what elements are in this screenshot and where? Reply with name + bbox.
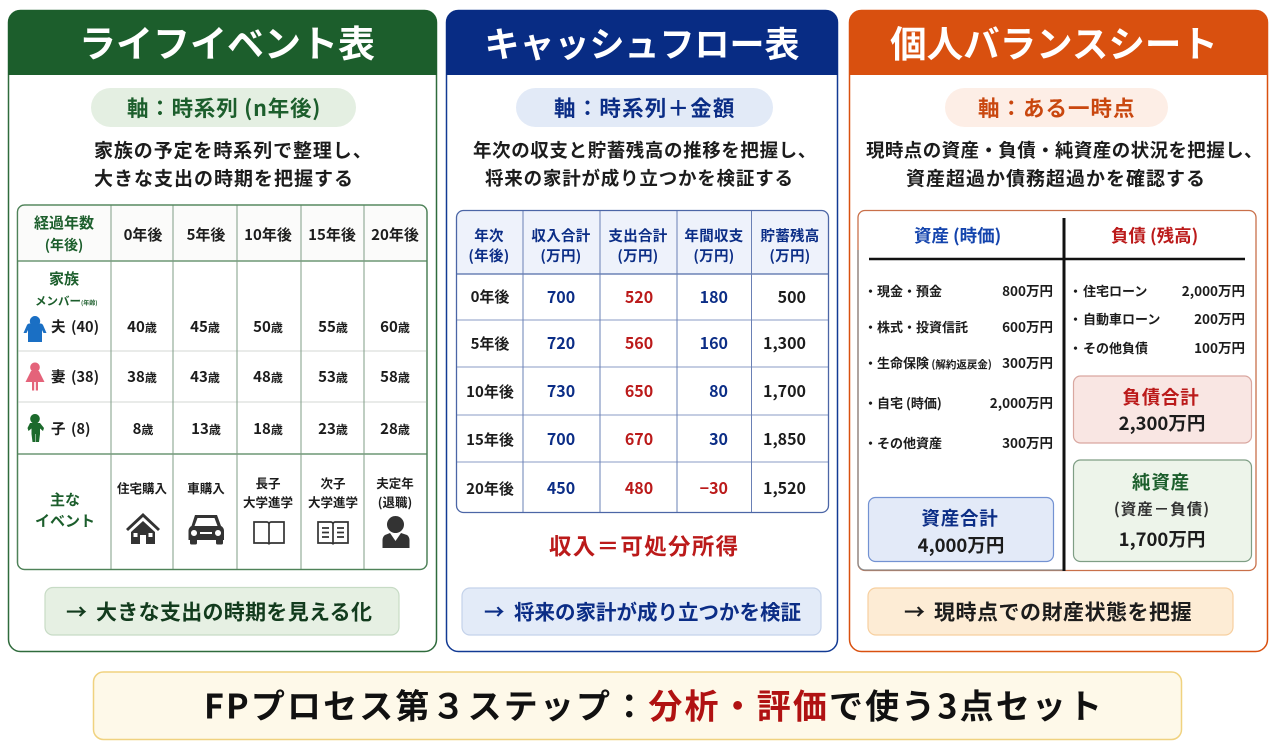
ages: husband row: 40歳 bbox=[127, 316, 157, 337]
ages: wife row: 53歳 bbox=[318, 366, 348, 387]
ages: wife row bbox=[127, 366, 410, 387]
note: income definition: 収入＝可処分所得 bbox=[549, 530, 739, 562]
ages: child row: 18歳 bbox=[253, 418, 283, 439]
year labels: 20年後 bbox=[466, 478, 514, 499]
expense column: 560 bbox=[625, 330, 653, 354]
assets list: 生命保険 bbox=[877, 353, 929, 372]
event labels: 夫定年 bbox=[376, 473, 414, 492]
description: cash flow: 年次の収支と貯蓄残高の推移を把握し、 bbox=[473, 137, 817, 163]
savings balance column: 1,850 bbox=[763, 426, 806, 450]
ages: child row bbox=[133, 418, 410, 439]
description: life event: 大きな支出の時期を把握する bbox=[94, 164, 354, 191]
savings balance column: 1,520 bbox=[763, 475, 806, 499]
year labels: 10年後 bbox=[466, 381, 514, 402]
table header row: (万円) bbox=[769, 245, 811, 266]
liabilities list: ・ bbox=[1069, 281, 1082, 300]
ages: child row: 13歳 bbox=[191, 418, 221, 439]
description: life event bbox=[94, 136, 373, 191]
savings balance column: 1,300 bbox=[763, 330, 806, 354]
bottom banner: FPプロセス第３ステップ：分析・評価で使う3点セット bbox=[204, 680, 1102, 728]
assets list: (解約返戻金) bbox=[929, 357, 992, 372]
main events label bbox=[35, 489, 95, 531]
icon: open book with lines bbox=[318, 522, 348, 544]
table header row: 年間収支 bbox=[684, 225, 744, 246]
assets list: 300万円 bbox=[1002, 352, 1053, 372]
annual balance column: 160 bbox=[700, 330, 728, 354]
wife label: (38) bbox=[71, 366, 99, 387]
assets list: 自宅 (時価) bbox=[877, 393, 942, 412]
child label: (8) bbox=[71, 418, 91, 439]
takeaway: balance sheet: → bbox=[904, 596, 926, 626]
husband label: 夫 bbox=[51, 316, 66, 337]
heading: life event table: ライフイベント表 bbox=[79, 14, 375, 68]
panel: life event table bbox=[8, 10, 437, 652]
assets list: ・ bbox=[864, 317, 877, 336]
takeaway: balance sheet bbox=[868, 588, 1233, 635]
annual balance column bbox=[700, 284, 728, 499]
year labels: 0年後 bbox=[471, 286, 509, 307]
icon: child bbox=[28, 414, 44, 442]
takeaway: cash flow bbox=[462, 588, 821, 635]
total liabilities box: 2,300万円 bbox=[1119, 410, 1205, 436]
total liabilities box: 負債合計 bbox=[1122, 384, 1200, 410]
assets list: 株式・投資信託 bbox=[877, 317, 968, 336]
table header row: 15年後 bbox=[308, 224, 356, 245]
heading: cash flow table: キャッシュフロー表 bbox=[484, 17, 800, 68]
ages: child row: 28歳 bbox=[380, 418, 410, 439]
year labels: 15年後 bbox=[466, 429, 514, 450]
annual balance column: 30 bbox=[709, 426, 728, 450]
assets list: 300万円 bbox=[1002, 432, 1053, 452]
description: cash flow: 将来の家計が成り立つかを検証する bbox=[485, 165, 794, 191]
ages: husband row: 55歳 bbox=[318, 316, 348, 337]
ages: child row: 23歳 bbox=[318, 418, 348, 439]
liabilities list: ・ bbox=[1069, 338, 1082, 357]
balance sheet table bbox=[858, 210, 1256, 571]
ages: wife row: 43歳 bbox=[190, 366, 220, 387]
liabilities list: 2,000万円 bbox=[1182, 280, 1245, 300]
savings balance column: 500 bbox=[778, 284, 806, 308]
family member heading: 家族 bbox=[49, 268, 79, 289]
table header row bbox=[34, 212, 419, 255]
axis pill: life event bbox=[91, 88, 356, 127]
savings balance column bbox=[763, 284, 806, 499]
total assets box: 4,000万円 bbox=[918, 532, 1004, 558]
ages: wife row: 48歳 bbox=[253, 366, 283, 387]
panel: personal balance sheet bbox=[849, 10, 1268, 652]
axis pill: balance sheet bbox=[945, 88, 1168, 127]
table header row bbox=[468, 225, 820, 266]
event labels: 車購入 bbox=[187, 478, 225, 497]
takeaway: cash flow: 将来の家計が成り立つかを検証 bbox=[514, 596, 801, 626]
table header row: (年後) bbox=[45, 235, 83, 255]
income column bbox=[547, 284, 575, 499]
liabilities list: 200万円 bbox=[1194, 308, 1245, 328]
income column: 730 bbox=[547, 378, 575, 402]
table header row: 経過年数 bbox=[34, 212, 94, 233]
year labels bbox=[466, 286, 514, 499]
event labels: 住宅購入 bbox=[117, 478, 167, 497]
total liabilities box bbox=[1074, 376, 1252, 443]
event labels: 大学進学 bbox=[243, 492, 293, 511]
takeaway: cash flow: → bbox=[484, 596, 504, 626]
child label: 子 bbox=[51, 418, 66, 439]
income column: 700 bbox=[547, 284, 575, 308]
ages: husband row: 45歳 bbox=[190, 316, 220, 337]
wife label: 妻 bbox=[51, 366, 66, 387]
axis pill: life event: 軸：時系列 (n年後) bbox=[127, 92, 321, 123]
icon: car bbox=[188, 515, 224, 544]
event labels: (退職) bbox=[378, 492, 412, 511]
takeaway: life event bbox=[45, 588, 399, 635]
event labels: 長子 bbox=[255, 473, 281, 492]
event labels: 大学進学 bbox=[308, 492, 358, 511]
annual balance column: −30 bbox=[700, 475, 728, 499]
table header row: 支出合計 bbox=[608, 225, 668, 246]
table header row: 貯蓄残高 bbox=[760, 225, 820, 246]
table header row: 0年後 bbox=[124, 224, 162, 245]
panel header: cash flow bbox=[446, 10, 838, 75]
table header row: 5年後 bbox=[187, 224, 225, 245]
ages: wife row: 38歳 bbox=[127, 366, 157, 387]
liabilities heading: 負債 (残高) bbox=[1111, 223, 1198, 248]
panel header: life event bbox=[8, 10, 437, 75]
assets list: 600万円 bbox=[1002, 316, 1053, 336]
cash flow data table bbox=[456, 210, 828, 512]
icon: house bbox=[126, 513, 160, 544]
event labels bbox=[117, 473, 414, 511]
icon: husband bbox=[24, 316, 46, 342]
total assets box bbox=[868, 498, 1054, 562]
main events label: イベント bbox=[35, 510, 95, 531]
description: life event: 家族の予定を時系列で整理し、 bbox=[94, 136, 373, 163]
assets list: 2,000万円 bbox=[990, 392, 1053, 412]
description: cash flow bbox=[473, 137, 817, 191]
description: balance sheet: 資産超過か債務超過かを確認する bbox=[906, 164, 1206, 191]
net worth box: 1,700万円 bbox=[1119, 526, 1205, 552]
table header row: 収入合計 bbox=[531, 225, 591, 246]
net worth box bbox=[1074, 460, 1252, 562]
net worth box: 純資産 bbox=[1132, 469, 1190, 495]
expense column bbox=[625, 284, 653, 499]
income column: 700 bbox=[547, 426, 575, 450]
annual balance column: 180 bbox=[700, 284, 728, 308]
net worth box: (資産－負債) bbox=[1114, 498, 1210, 520]
table header row: (万円) bbox=[617, 245, 659, 266]
liabilities list: その他負債 bbox=[1083, 338, 1148, 357]
icon: wife bbox=[26, 362, 44, 390]
assets list bbox=[864, 280, 1053, 452]
total assets box: 資産合計 bbox=[921, 505, 999, 531]
assets list: その他資産 bbox=[877, 433, 942, 452]
savings balance column: 1,700 bbox=[763, 378, 806, 402]
family member heading bbox=[35, 268, 98, 309]
takeaway: life event: → bbox=[66, 596, 87, 626]
assets list: ・ bbox=[864, 393, 877, 412]
ages: wife row: 58歳 bbox=[380, 366, 410, 387]
ages: husband row bbox=[127, 316, 410, 337]
ages: husband row: 60歳 bbox=[380, 316, 410, 337]
takeaway: life event: 大きな支出の時期を見える化 bbox=[96, 596, 372, 626]
axis pill: balance sheet: 軸：ある一時点 bbox=[978, 92, 1136, 123]
expense column: 520 bbox=[625, 284, 653, 308]
liabilities list bbox=[1069, 280, 1245, 357]
table header row: 10年後 bbox=[244, 224, 292, 245]
assets list: 現金・預金 bbox=[877, 281, 942, 300]
assets list: ・ bbox=[864, 353, 877, 372]
icon: retired person bbox=[382, 516, 410, 548]
ages: child row: 8歳 bbox=[133, 418, 153, 439]
liabilities list: 自動車ローン bbox=[1083, 309, 1160, 328]
family member heading: メンバー(年齢) bbox=[35, 293, 98, 309]
panel: cash flow table bbox=[446, 10, 838, 652]
ages: husband row: 50歳 bbox=[253, 316, 283, 337]
assets list: ・ bbox=[864, 433, 877, 452]
liabilities list: 住宅ローン bbox=[1083, 281, 1147, 300]
table header row: 年次 bbox=[474, 225, 504, 246]
assets list: 800万円 bbox=[1002, 280, 1053, 300]
expense column: 480 bbox=[625, 475, 653, 499]
table header row: (万円) bbox=[693, 245, 735, 266]
year labels: 5年後 bbox=[471, 333, 509, 354]
takeaway: balance sheet: 現時点での財産状態を把握 bbox=[934, 596, 1192, 626]
heading: personal balance sheet: 個人バランスシート bbox=[890, 15, 1218, 68]
table header row: (万円) bbox=[540, 245, 582, 266]
income column: 720 bbox=[547, 330, 575, 354]
description: balance sheet bbox=[866, 137, 1263, 191]
bottom banner bbox=[94, 672, 1182, 740]
life event grid table bbox=[18, 205, 427, 570]
income column: 450 bbox=[547, 475, 575, 499]
description: balance sheet: 現時点の資産・負債・純資産の状況を把握し、 bbox=[866, 137, 1263, 163]
main events label: 主な bbox=[50, 489, 80, 510]
expense column: 670 bbox=[625, 426, 653, 450]
husband label: (40) bbox=[71, 316, 99, 337]
icon: open book bbox=[254, 522, 284, 544]
annual balance column: 80 bbox=[709, 378, 728, 402]
assets list: ・ bbox=[864, 281, 877, 300]
panel header: balance sheet bbox=[849, 10, 1268, 75]
event labels: 次子 bbox=[320, 473, 346, 492]
assets heading: 資産 (時価) bbox=[914, 223, 1001, 248]
expense column: 650 bbox=[625, 378, 653, 402]
axis pill: cash flow bbox=[516, 88, 773, 127]
table header row: (年後) bbox=[468, 245, 510, 266]
axis pill: cash flow: 軸：時系列＋金額 bbox=[554, 92, 736, 123]
liabilities list: ・ bbox=[1069, 309, 1082, 328]
table header row: 20年後 bbox=[371, 224, 419, 245]
liabilities list: 100万円 bbox=[1194, 337, 1245, 357]
